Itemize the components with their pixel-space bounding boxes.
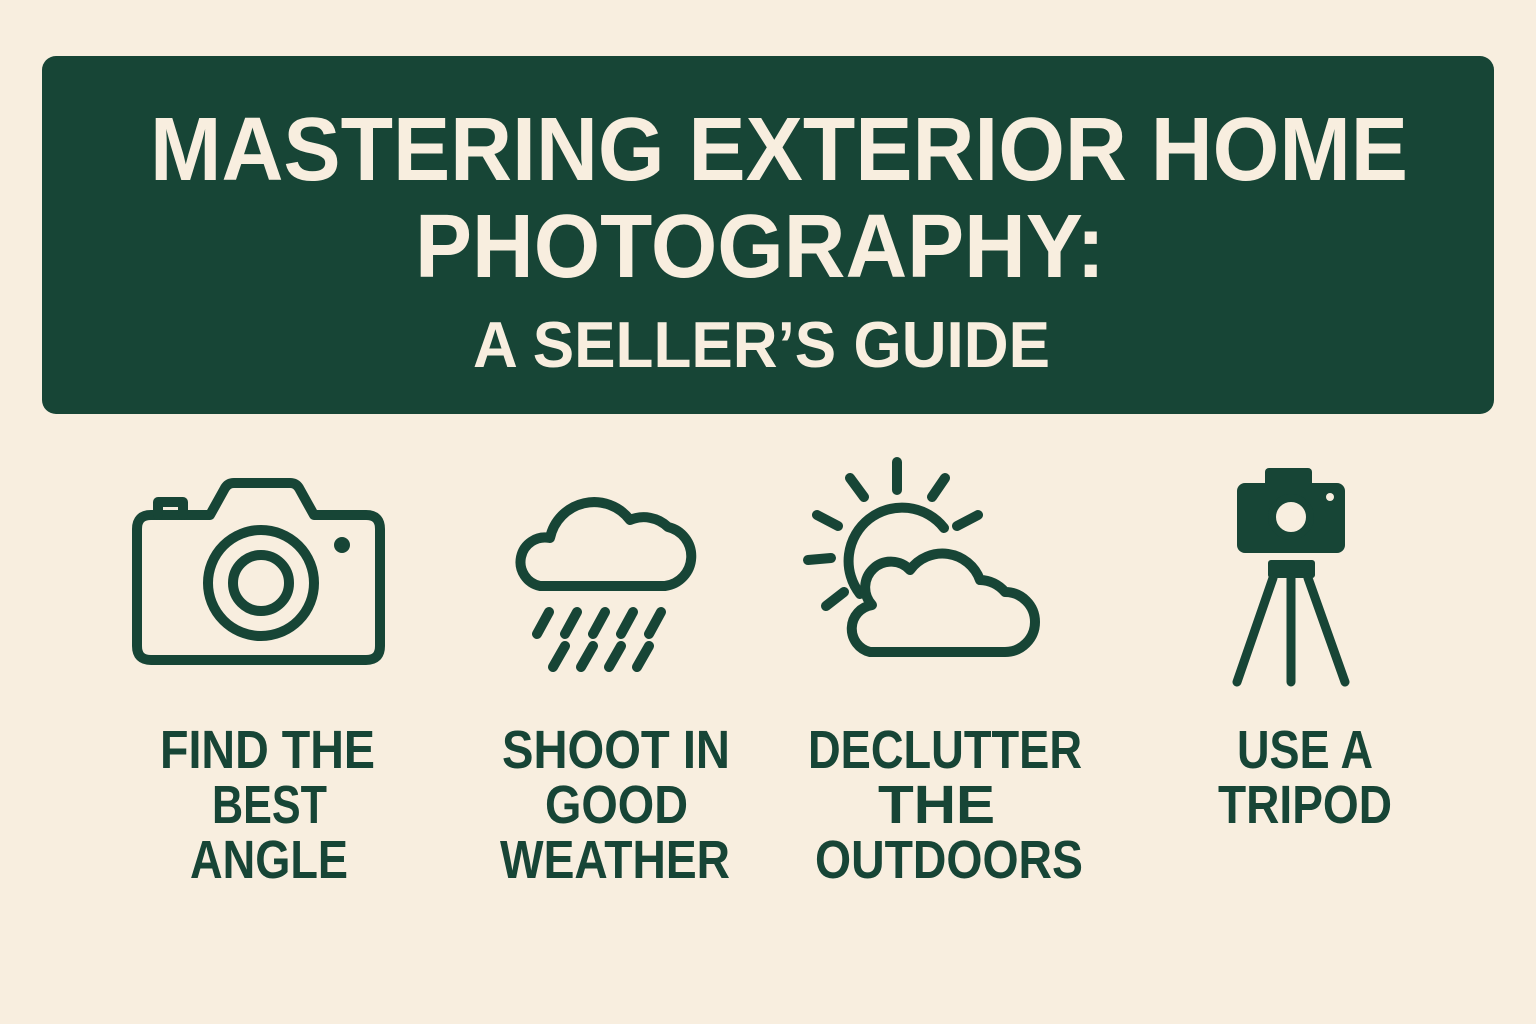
label: find the best angle: BEST xyxy=(212,775,327,835)
label: shoot in good weather: GOOD xyxy=(545,775,688,835)
label: declutter the outdoors: THE xyxy=(878,775,995,835)
subtitle: A SELLER’S GUIDE xyxy=(473,308,1050,381)
label: shoot in good weather xyxy=(500,720,730,890)
title: MASTERING EXTERIOR HOME xyxy=(150,100,1408,200)
title banner xyxy=(42,56,1494,414)
title: PHOTOGRAPHY: xyxy=(415,197,1105,297)
label: declutter the outdoors: OUTDOORS xyxy=(815,830,1083,890)
label: declutter the outdoors xyxy=(808,720,1083,890)
label: use a tripod xyxy=(1218,720,1392,835)
label: declutter the outdoors: DECLUTTER xyxy=(808,720,1082,780)
label: use a tripod: USE A xyxy=(1237,720,1373,780)
label: shoot in good weather: SHOOT IN xyxy=(502,720,730,780)
icon: camera xyxy=(137,483,380,660)
title xyxy=(150,100,1408,297)
icon: sun and cloud xyxy=(808,462,1035,652)
label: use a tripod: TRIPOD xyxy=(1218,775,1392,835)
label: find the best angle xyxy=(160,720,375,890)
label: shoot in good weather: WEATHER xyxy=(500,830,730,890)
icon: rain cloud xyxy=(521,502,691,667)
icon: camera on tripod xyxy=(1237,468,1345,682)
label: find the best angle: FIND THE xyxy=(160,720,375,780)
label: find the best angle: ANGLE xyxy=(190,830,348,890)
